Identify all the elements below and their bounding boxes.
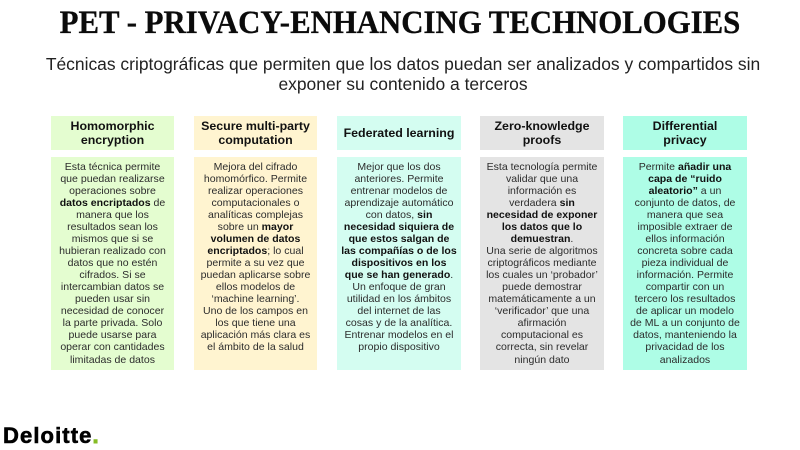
panel: Zero-knowledge proofs text: demuestran. <box>511 233 573 245</box>
panel: Zero-knowledge proofs text: Esta tecnología permite <box>487 161 597 173</box>
panel: Federated learning text: que se han generado. <box>345 269 453 281</box>
panel: Differential privacy text: concreta sobre cada <box>637 245 733 257</box>
panel: Federated learning text: con datos, sin <box>366 209 432 221</box>
panel: Homomorphic encryption text: manera que los <box>76 209 149 221</box>
panel: Federated learning text <box>337 157 461 370</box>
panel: Zero-knowledge proofs text: ‘verificador’ que una <box>495 305 589 317</box>
heading: Homomorphic encryption <box>51 116 174 150</box>
panel: Homomorphic encryption text: intercambian datos se <box>61 281 164 293</box>
panel: Zero-knowledge proofs text: correcta, sin revelar <box>496 341 588 353</box>
panel: Homomorphic encryption text: datos encriptados de <box>60 197 165 209</box>
panel: Homomorphic encryption text: necesidad de conocer <box>61 305 164 317</box>
panel: Secure multi-party computation text: encriptados; lo cual <box>207 245 304 257</box>
heading: Secure multi-party computation: Secure multi-party <box>201 119 310 133</box>
panel: Homomorphic encryption text: la parte privada. Solo <box>63 317 162 329</box>
panel: Differential privacy text: ellos información <box>645 233 725 245</box>
panel: Federated learning text: aprendizaje automático <box>344 197 454 209</box>
panel: Homomorphic encryption text: datos que no estén <box>68 257 157 269</box>
panel: Secure multi-party computation text: aplicación más clara es <box>201 329 310 341</box>
panel: Homomorphic encryption text: operar con cantidades <box>60 341 165 353</box>
logo: Deloitte: Deloitte. <box>3 423 100 448</box>
heading: Federated learning <box>337 116 461 150</box>
panel: Federated learning text: cosas y de la analítica. <box>346 317 452 329</box>
subtitle: Técnicas criptográficas que permiten que los datos puedan ser analizados y compartidos sin <box>46 54 760 74</box>
panel: Federated learning text: las compañías o de los <box>341 245 457 257</box>
panel: Zero-knowledge proofs text: computacional es <box>501 329 583 341</box>
panel: Differential privacy text: pieza individual de <box>642 257 728 269</box>
panel: Zero-knowledge proofs text: necesidad de exponer <box>487 209 597 221</box>
panel: Secure multi-party computation text: computacionales o <box>212 197 299 209</box>
heading: Differential privacy: Differential <box>653 119 717 133</box>
heading: Homomorphic encryption: encryption <box>81 133 144 147</box>
panel: Secure multi-party computation text: ellos modelos de <box>216 281 295 293</box>
panel: Federated learning text: del internet de las <box>357 305 441 317</box>
panel: Homomorphic encryption text: pueden usar sin <box>75 293 150 305</box>
panel: Differential privacy text: capa de “ruido <box>648 173 722 185</box>
panel: Federated learning text: entrenar modelos de <box>351 185 447 197</box>
panel: Zero-knowledge proofs text: validar que una <box>506 173 578 185</box>
panel: Zero-knowledge proofs text: los datos que lo <box>502 221 582 233</box>
panel: Homomorphic encryption text: puede usarse para <box>69 329 156 341</box>
panel: Differential privacy text: imposible extraer de <box>638 221 732 233</box>
panel: Zero-knowledge proofs text: Una serie de algoritmos <box>486 245 598 257</box>
panel: Differential privacy text: manera que sea <box>647 209 723 221</box>
panel: Homomorphic encryption text: que puedan realizarse <box>60 173 165 185</box>
panel: Homomorphic encryption text: operaciones sobre <box>69 185 156 197</box>
panel: Homomorphic encryption text: limitadas de datos <box>70 354 155 366</box>
panel: Homomorphic encryption text: Esta técnica permite <box>65 161 160 173</box>
heading: Zero-knowledge proofs <box>480 116 604 150</box>
heading: Differential privacy: privacy <box>663 133 707 147</box>
panel: Zero-knowledge proofs text: ningún dato <box>514 354 570 366</box>
panel: Secure multi-party computation text: permite a su vez que <box>207 257 304 269</box>
panel: Federated learning text: propio dispositivo <box>358 341 440 353</box>
panel: Differential privacy text: privacidad de los <box>645 341 725 353</box>
panel: Differential privacy text: Permite añadir una <box>639 161 731 173</box>
heading: Zero-knowledge proofs: proofs <box>523 133 561 147</box>
panel: Federated learning text: dispositivos en los <box>352 257 446 269</box>
panel: Homomorphic encryption text: mismos que si se <box>72 233 153 245</box>
panel: Federated learning text: Un enfoque de gran <box>352 281 446 293</box>
title: PET - PRIVACY-ENHANCING TECHNOLOGIES <box>60 5 740 41</box>
panel: Secure multi-party computation text: homomórfico. Permite <box>204 173 307 185</box>
panel: Federated learning text: utilidad en los ámbitos <box>347 293 451 305</box>
panel: Homomorphic encryption text <box>51 157 174 370</box>
panel: Federated learning text: anteriores. Permite <box>354 173 444 185</box>
panel: Differential privacy text: de aplicar un modelo <box>636 305 734 317</box>
heading: Differential privacy <box>623 116 747 150</box>
panel: Federated learning text: Mejor que los dos <box>357 161 441 173</box>
heading: Homomorphic encryption: Homomorphic <box>70 119 154 133</box>
panel: Zero-knowledge proofs text: los cuales un ‘probador’ <box>486 269 598 281</box>
panel: Homomorphic encryption text: cifrados. Si se <box>79 269 146 281</box>
heading: Secure multi-party computation: computation <box>218 133 293 147</box>
panel: Secure multi-party computation text: puedan aplicarse sobre <box>201 269 310 281</box>
subtitle <box>46 54 760 94</box>
heading: Zero-knowledge proofs: Zero-knowledge <box>494 119 590 133</box>
panel: Zero-knowledge proofs text: matemáticamente a un <box>488 293 596 305</box>
panel: Secure multi-party computation text: Mejora del cifrado <box>214 161 297 173</box>
panel: Secure multi-party computation text: el ámbito de la salud <box>207 341 304 353</box>
panel: Secure multi-party computation text <box>194 157 317 370</box>
panel: Homomorphic encryption text: hubieran realizado con <box>59 245 166 257</box>
panel: Federated learning text: Entrenar modelos en el <box>344 329 454 341</box>
panel: Zero-knowledge proofs text: verdadera sin <box>509 197 575 209</box>
panel: Differential privacy text: datos, manteniendo la <box>633 329 737 341</box>
panel: Federated learning text: que estos salgan de <box>349 233 449 245</box>
panel: Secure multi-party computation text: Uno de los campos en <box>203 305 308 317</box>
heading: Federated learning: Federated learning <box>344 126 454 140</box>
panel: Differential privacy text: conjunto de datos, de <box>635 197 735 209</box>
panel: Differential privacy text: compartir con un <box>646 281 724 293</box>
heading: Secure multi-party computation <box>194 116 317 150</box>
panel: Secure multi-party computation text: volumen de datos <box>211 233 300 245</box>
panel: Differential privacy text: de ML a un conjunto de <box>630 317 740 329</box>
panel: Secure multi-party computation text: realizar operaciones <box>208 185 303 197</box>
panel: Secure multi-party computation text: analíticas complejas <box>208 209 303 221</box>
panel: Zero-knowledge proofs text: información es <box>508 185 576 197</box>
panel: Secure multi-party computation text: sobre un mayor <box>218 221 293 233</box>
panel: Homomorphic encryption text: resultados sean los <box>67 221 158 233</box>
panel: Secure multi-party computation text: ‘machine learning’. <box>212 293 299 305</box>
panel: Federated learning text: necesidad siquiera de <box>344 221 454 233</box>
panel: Zero-knowledge proofs text: afirmación <box>518 317 566 329</box>
panel: Differential privacy text: aleatorio” a un <box>649 185 721 197</box>
panel: Zero-knowledge proofs text: criptográficos mediante <box>487 257 597 269</box>
panel: Differential privacy text: tercero los resultados <box>635 293 735 305</box>
panel: Differential privacy text <box>623 157 747 370</box>
panel: Differential privacy text: información. Permite <box>637 269 733 281</box>
subtitle: exponer su contenido a terceros <box>278 74 528 94</box>
panel: Differential privacy text: analizados <box>660 354 710 366</box>
panel: Zero-knowledge proofs text: puede demostrar <box>502 281 582 293</box>
panel: Secure multi-party computation text: los que tiene una <box>215 317 296 329</box>
panel: Zero-knowledge proofs text <box>480 157 604 370</box>
